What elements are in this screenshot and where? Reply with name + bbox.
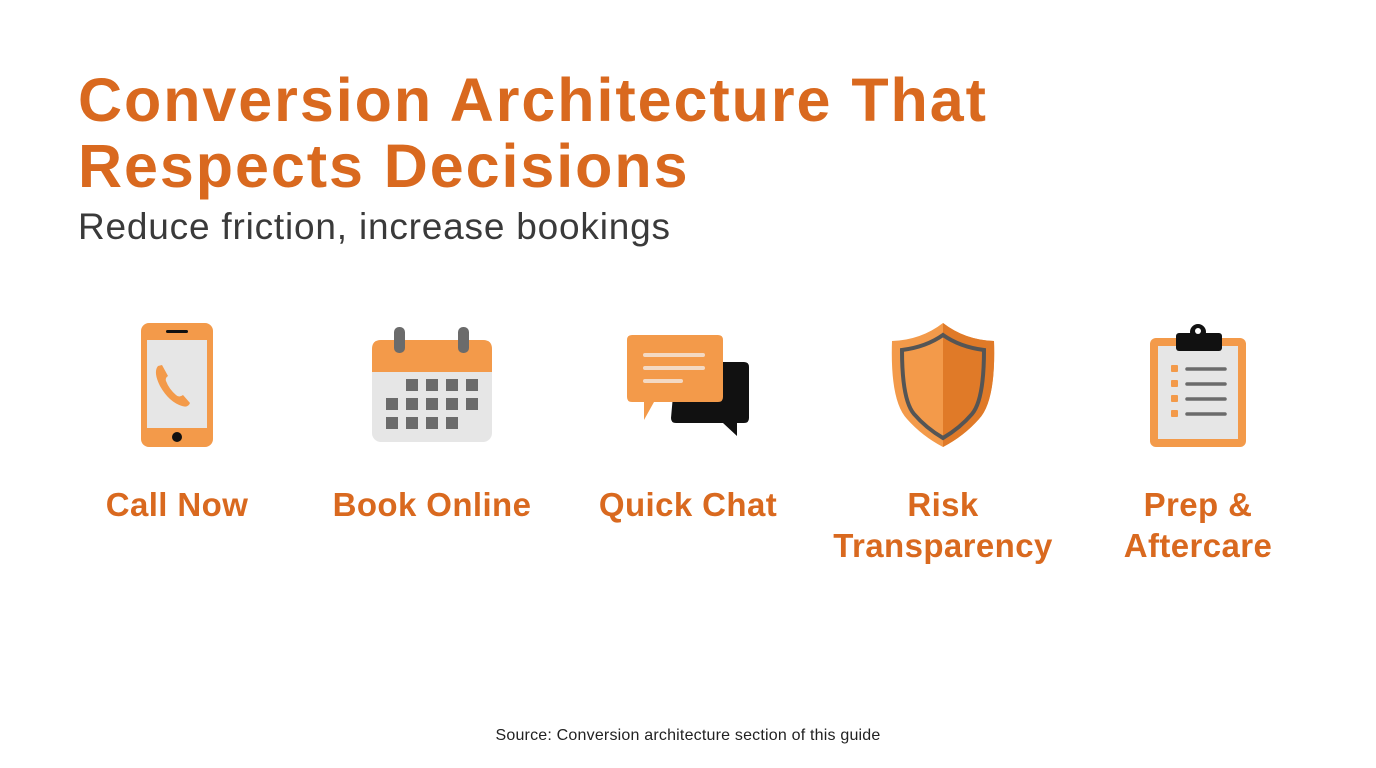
title: Respects Decisions — [78, 132, 689, 200]
source note: Source: Conversion architecture section of this guide — [495, 727, 881, 744]
icon: chat — [627, 335, 749, 436]
title — [78, 66, 988, 200]
icon: phone — [141, 323, 213, 447]
label: risk transparency — [833, 486, 1053, 564]
label: prep & aftercare — [1124, 486, 1272, 564]
label: prep & aftercare: Prep & — [1144, 486, 1252, 523]
icon: calendar — [372, 327, 492, 442]
label: risk transparency: Risk — [907, 486, 979, 523]
label: risk transparency: Transparency — [833, 527, 1053, 564]
icon: shield — [892, 323, 994, 447]
label: prep & aftercare: Aftercare — [1124, 527, 1272, 564]
subtitle: Reduce friction, increase bookings — [78, 206, 671, 247]
label: call now: Call Now — [106, 486, 248, 523]
label: book online: Book Online — [333, 486, 531, 523]
title: Conversion Architecture That — [78, 66, 988, 134]
label: quick chat: Quick Chat — [599, 486, 777, 523]
icon: clipboard — [1150, 324, 1246, 447]
